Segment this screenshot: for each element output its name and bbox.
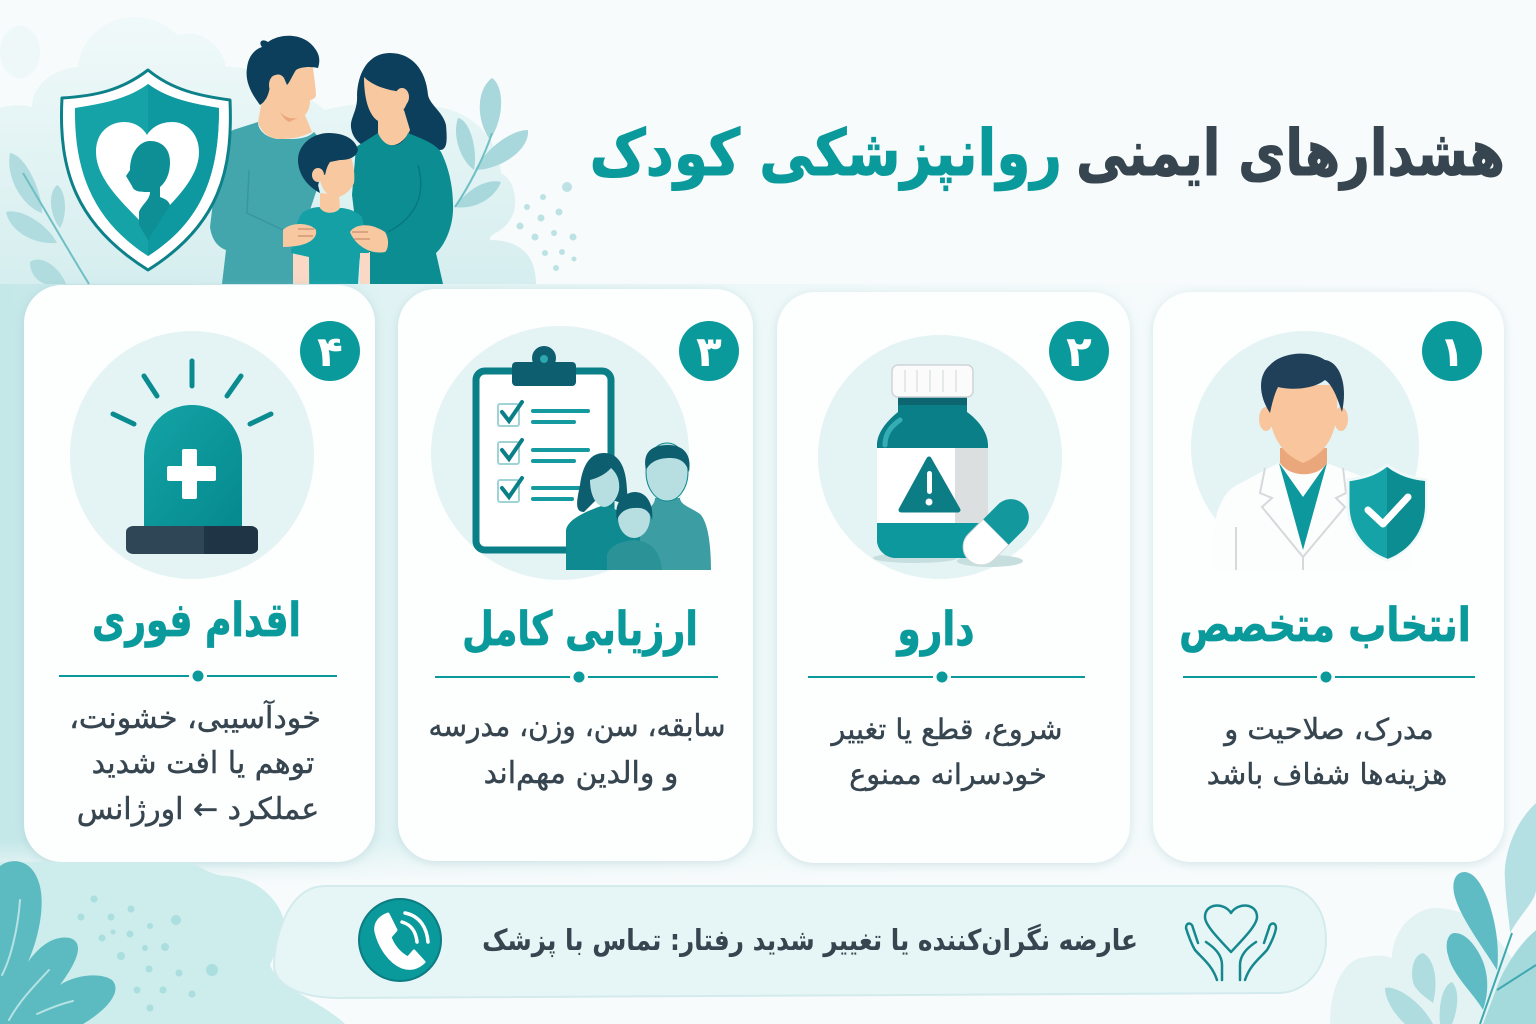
icon: clipboard and family [431, 326, 711, 580]
bottom left decoration [0, 861, 345, 1024]
number badge 1: ۱ [1439, 327, 1465, 376]
number badge 2 [1049, 321, 1109, 381]
background band behind cards [0, 284, 1536, 884]
right leaves [455, 78, 528, 207]
number badge 4 [300, 321, 360, 381]
heading: انتخاب متخصص [1179, 598, 1471, 653]
father [210, 36, 330, 284]
icon: hands holding heart [1186, 906, 1276, 980]
body text: عملکرد ← اورژانس [77, 792, 319, 827]
left leaves [6, 153, 66, 284]
mother figure [566, 505, 640, 570]
bottom right decoration [1330, 803, 1536, 1024]
body text: هزینه‌ها شفاف باشد [1207, 757, 1447, 791]
mother [351, 53, 453, 284]
body text: خودآسیبی، خشونت، [69, 700, 321, 736]
band fade [0, 840, 1536, 886]
number badge 4: ۴ [317, 327, 343, 376]
divider [1183, 668, 1475, 686]
body text [428, 709, 726, 791]
body text: سابقه، سن، وزن، مدرسه [428, 709, 726, 744]
card 4 [24, 285, 375, 862]
callout text: عارضه نگران‌کننده یا تغییر شدید رفتار: تماس با پزشک [482, 923, 1138, 958]
heading: دارو [896, 602, 975, 657]
divider [808, 668, 1085, 686]
shield with heart and child [61, 70, 230, 270]
card 2 [777, 292, 1130, 863]
decorative hero clouds and leaves [0, 17, 576, 284]
body text [830, 712, 1062, 791]
title: هشدارهای ایمنی [1076, 115, 1505, 190]
divider [59, 667, 337, 685]
number badge 1 [1422, 321, 1482, 381]
dots [516, 182, 576, 271]
child figure [607, 540, 662, 570]
heading: اقدام فوری [92, 592, 301, 648]
divider [435, 668, 718, 686]
hands [283, 224, 388, 253]
number badge 2: ۲ [1066, 327, 1092, 376]
body text [69, 700, 321, 827]
father figure [640, 498, 711, 570]
number badge 3 [679, 321, 739, 381]
card 3 [398, 289, 753, 861]
body text: مدرک، صلاحیت و [1222, 712, 1434, 746]
icon: phone [359, 899, 441, 981]
body text: و والدین مهم‌اند [484, 756, 678, 791]
card 1 [1153, 292, 1504, 862]
icon: medicine bottle and pill [818, 335, 1062, 579]
body text [1207, 712, 1447, 791]
icon: siren [70, 331, 314, 579]
body text: خودسرانه ممنوع [849, 757, 1047, 791]
body text: توهم یا افت شدید [92, 746, 314, 781]
bottom callout bar [274, 886, 1326, 998]
heading: ارزیابی کامل [462, 601, 698, 656]
title: روانپزشکی کودک [590, 117, 1062, 191]
child [291, 133, 370, 284]
hero: family illustration [210, 36, 453, 284]
title [590, 115, 1505, 191]
icon: doctor with shield [1191, 331, 1426, 570]
number badge 3: ۳ [696, 327, 722, 376]
body text: شروع، قطع یا تغییر [830, 712, 1062, 746]
